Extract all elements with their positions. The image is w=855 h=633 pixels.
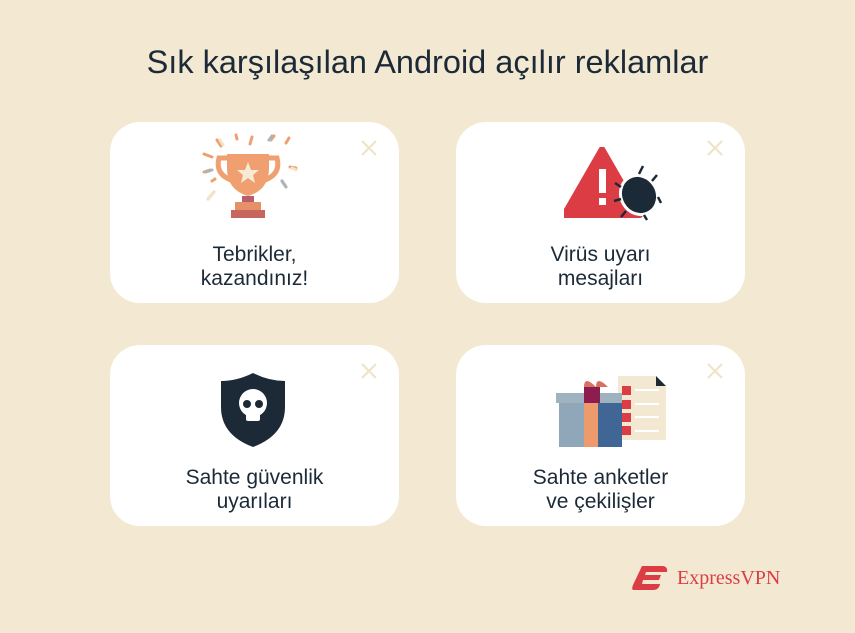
text: Virüs uyarı bbox=[550, 243, 650, 266]
icon: shield with skull bbox=[221, 373, 285, 447]
text bbox=[186, 466, 324, 513]
logo: ExpressVPN bbox=[632, 566, 780, 590]
text bbox=[550, 243, 650, 290]
logo: ExpressVPN: ExpressVPN bbox=[677, 567, 780, 589]
icon: warning with bug bbox=[564, 147, 662, 221]
icon: close bbox=[361, 140, 377, 156]
icon: close bbox=[707, 140, 723, 156]
icon: close bbox=[361, 363, 377, 379]
text: ve çekilişler bbox=[546, 490, 655, 513]
text bbox=[533, 466, 668, 513]
panel: fake surveys bbox=[456, 345, 745, 526]
panel: virus warnings bbox=[456, 122, 745, 303]
icon: trophy bbox=[202, 134, 298, 218]
text: kazandınız! bbox=[201, 267, 308, 290]
text: Sahte güvenlik bbox=[186, 466, 323, 489]
icon: close bbox=[707, 363, 723, 379]
panel: congratulations bbox=[110, 122, 399, 303]
icon: gift and checklist bbox=[556, 376, 666, 447]
text: uyarıları bbox=[217, 490, 292, 513]
text: Sahte anketler bbox=[533, 466, 668, 489]
text bbox=[201, 243, 308, 290]
text: Tebrikler, bbox=[212, 243, 297, 266]
panel: fake security bbox=[110, 345, 399, 526]
text: mesajları bbox=[558, 267, 643, 290]
title: Sık karşılaşılan Android açılır reklamlar bbox=[147, 44, 708, 80]
